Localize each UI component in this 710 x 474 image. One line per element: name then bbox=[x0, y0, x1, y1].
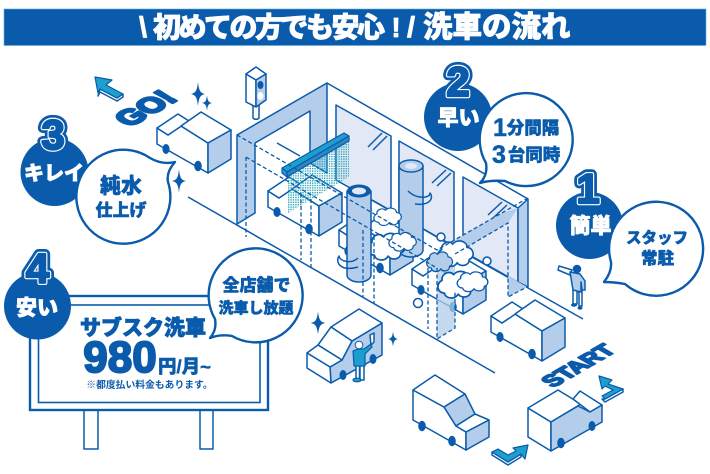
point 4: cheap bbox=[4, 245, 303, 342]
footnote: ※都度払い料金もあります。 bbox=[86, 378, 213, 391]
traffic signal bbox=[246, 67, 266, 119]
bubble text: 台同時 bbox=[508, 145, 560, 165]
badge label: 早い bbox=[438, 107, 480, 130]
bubble text: 洗車し放題 bbox=[218, 299, 294, 317]
badge number: 1 bbox=[576, 165, 600, 212]
badge circle bbox=[556, 192, 623, 259]
title banner: / bbox=[407, 12, 415, 44]
badge number: 3 bbox=[41, 111, 65, 158]
subscription heading: サブスク洗車 bbox=[80, 316, 206, 340]
van at bottom bbox=[413, 375, 489, 450]
billboard frame bbox=[30, 296, 268, 410]
point 1: easy bbox=[556, 165, 703, 296]
arrow: start lower bbox=[492, 445, 528, 465]
speech bubble bbox=[76, 150, 175, 244]
staff figure bbox=[558, 265, 585, 310]
badge number: 4 bbox=[26, 245, 50, 292]
bubble text: 仕上げ bbox=[96, 201, 146, 220]
bubble text: 分間隔 bbox=[507, 118, 559, 138]
title banner bbox=[4, 9, 706, 46]
badge number: 2 bbox=[446, 58, 470, 105]
truck at start bbox=[528, 390, 602, 451]
foam clouds, middle truck bbox=[368, 208, 416, 260]
badge number: 1 bbox=[576, 165, 600, 212]
GO label: GO! bbox=[107, 86, 185, 131]
badge label: 安い bbox=[16, 297, 58, 320]
title banner: 洗車の流れ bbox=[423, 11, 571, 44]
billboard bbox=[30, 296, 268, 449]
badge label: 簡単 bbox=[570, 214, 612, 238]
badge number: 4 bbox=[26, 245, 50, 292]
bubble text: 純水 bbox=[100, 175, 142, 198]
badge number: 2 bbox=[446, 58, 470, 105]
translucent near arch beam bbox=[437, 208, 518, 254]
badge number: 3 bbox=[41, 111, 65, 158]
dashed outlines of the wash frame bbox=[237, 135, 528, 339]
badge number: 2 bbox=[446, 58, 470, 105]
back glass panels bbox=[336, 105, 518, 283]
truck under curtain wash bbox=[268, 175, 342, 236]
front rotating brush bbox=[338, 184, 371, 282]
bubble text: 常駐 bbox=[641, 248, 674, 268]
title banner: 初めての方でも安心 bbox=[153, 12, 385, 43]
badge number: 3 bbox=[41, 111, 65, 158]
price: 980 bbox=[83, 333, 157, 382]
sparkles bbox=[172, 82, 398, 346]
badge circle bbox=[424, 83, 492, 151]
speech bubble bbox=[480, 93, 573, 186]
car wash building bbox=[237, 83, 583, 319]
bubble text bbox=[626, 229, 688, 268]
entrance gate bbox=[237, 83, 327, 224]
badge circle bbox=[4, 272, 71, 340]
bubble text: 1 bbox=[493, 114, 507, 142]
foam clouds, front truck bbox=[414, 233, 491, 308]
exit pillar bbox=[518, 199, 528, 287]
pure water curtain bbox=[282, 133, 349, 213]
bubble text: 全店舗で bbox=[222, 275, 290, 295]
price unit: 円/月~ bbox=[158, 356, 211, 377]
speech bubble bbox=[209, 248, 303, 342]
road line: near edge bbox=[188, 197, 495, 373]
bubble text bbox=[218, 275, 294, 317]
title banner: ! bbox=[391, 12, 401, 43]
bubble text: 3 bbox=[492, 141, 506, 169]
bubble text: スタッフ bbox=[626, 229, 688, 247]
billboard legs bbox=[84, 410, 213, 449]
truck entering wash bbox=[491, 300, 565, 361]
truck in foam, front bbox=[412, 253, 486, 314]
near arch leg bbox=[437, 252, 455, 339]
arrow: exit direction bbox=[95, 77, 123, 101]
badge number: 1 bbox=[576, 165, 600, 212]
car being hand washed bbox=[307, 309, 382, 383]
START label: START bbox=[535, 340, 621, 391]
badge label: キレイ bbox=[24, 163, 84, 185]
back rotating brush bbox=[399, 160, 431, 257]
point 2: fast bbox=[424, 58, 573, 186]
washer figure bbox=[353, 333, 374, 382]
truck in foam, middle bbox=[339, 214, 413, 275]
bubble text bbox=[96, 175, 146, 220]
speech bubble bbox=[604, 202, 703, 296]
GO truck bbox=[157, 112, 231, 173]
arrow: start upper bbox=[599, 376, 623, 402]
badge circle bbox=[20, 138, 88, 206]
title banner: \ bbox=[139, 12, 147, 44]
point 3: clean bbox=[20, 111, 175, 244]
back wall top edge and floor line bbox=[277, 83, 583, 319]
bubble text bbox=[492, 114, 560, 169]
badge number: 4 bbox=[26, 245, 50, 292]
